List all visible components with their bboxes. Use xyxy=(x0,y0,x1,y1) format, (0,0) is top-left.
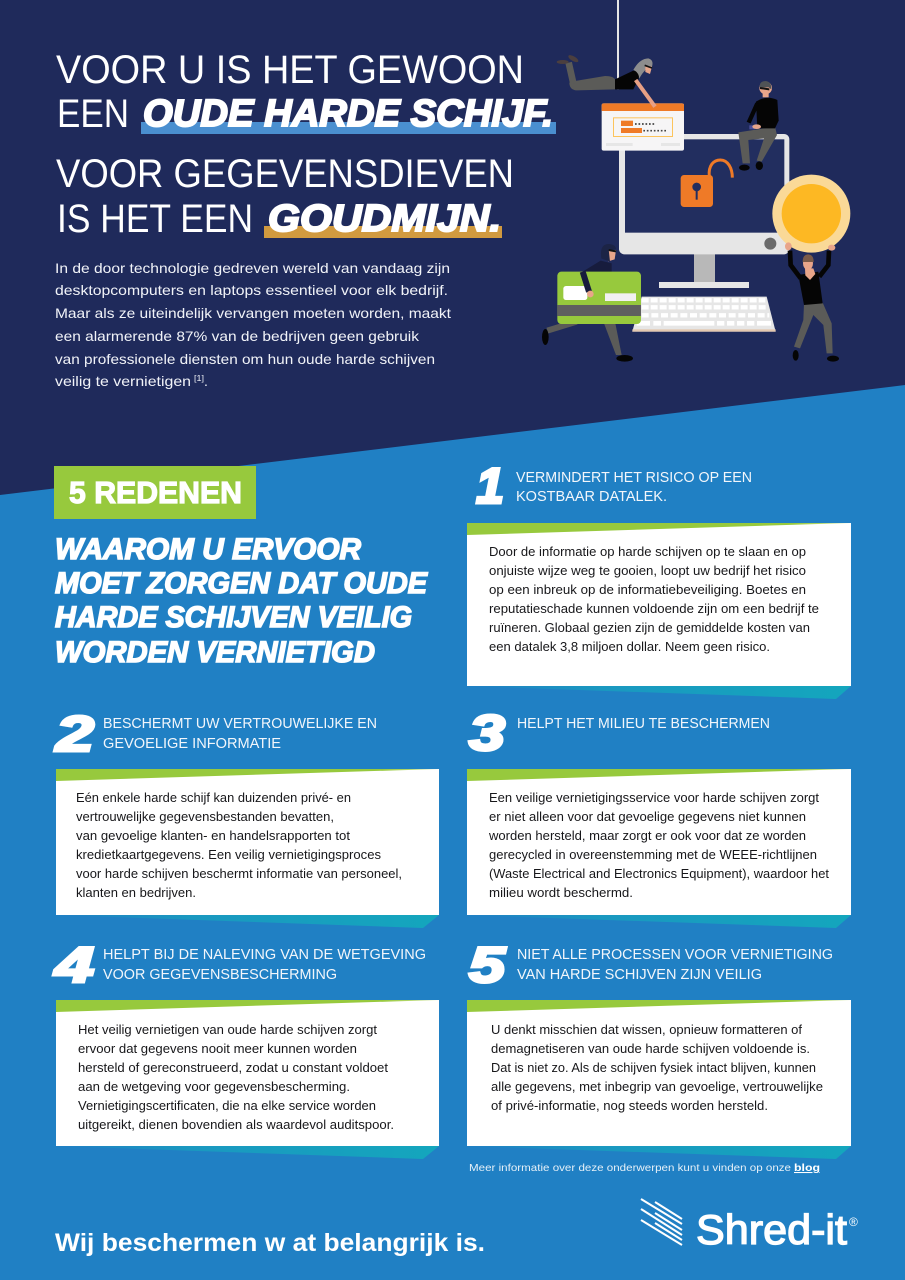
panel: reason 1: KOSTBAAR DATALEK. xyxy=(516,488,667,505)
panel: reason 5: U denkt misschien dat wissen, opnieuw formatteren of xyxy=(491,1022,802,1037)
panel: reason 4: 4 xyxy=(54,937,94,993)
panel: reason 1: reputatieschade kunnen voldoende zijn om een bedrijf te xyxy=(489,601,819,616)
footnote: blog link: blog xyxy=(794,1162,820,1174)
panel: reason 3: worden hersteld, maar zorgt er ook voor dat ze worden xyxy=(488,828,806,843)
intro text: . xyxy=(204,373,208,389)
title: EEN xyxy=(57,92,129,136)
panel: reason 2: 2 xyxy=(55,706,94,762)
panel: reason 3: Een veilige vernietigingsservice voor harde schijven zorgt xyxy=(489,790,819,805)
background: blue diagonal section xyxy=(0,385,905,1280)
slogan: Wij beschermen w at belangrijk is. xyxy=(55,1229,485,1257)
panel: reason 5: VAN HARDE SCHIJVEN ZIJN VEILIG xyxy=(517,966,762,983)
heading: waarom: WAAROM U ERVOOR xyxy=(55,533,362,566)
panel: reason 3: (Waste Electrical and Electronics Equipment), waardoor het xyxy=(489,866,829,881)
panel: reason 4: Het veilig vernietigen van oude harde schijven zorgt xyxy=(78,1022,377,1037)
panel: reason 5: demagnetiseren van oude harde schijven voldoende is. xyxy=(491,1041,810,1056)
icon: rope xyxy=(617,0,619,89)
icon: credit card xyxy=(557,272,641,324)
badge: 5 redenen xyxy=(54,466,256,519)
icon: login window xyxy=(602,103,684,151)
panel: reason 2: kredietkaartgegevens. Een veilig vernietigingsproces xyxy=(76,847,381,862)
icon: monitor xyxy=(619,134,789,288)
panel: reason 1: VERMINDERT HET RISICO OP EEN xyxy=(516,469,752,486)
badge: 5 redenen: 5 REDENEN xyxy=(69,475,242,510)
logo: Shred-it: Shred-it xyxy=(696,1206,847,1253)
panel: reason 4: hersteld of gereconstrueerd, zodat u constant voldoet xyxy=(78,1060,388,1075)
panel: reason 3 xyxy=(467,705,851,928)
title xyxy=(56,48,556,241)
title: IS HET EEN xyxy=(57,197,253,241)
panel: reason 2: GEVOELIGE INFORMATIE xyxy=(103,735,281,752)
title: VOOR U IS HET GEWOON xyxy=(56,48,524,92)
title: GOUDMIJN. xyxy=(268,198,501,240)
logo: Shred-it: ® xyxy=(849,1215,858,1229)
panel: reason 4: Vernietigingscertificaten, die na elke service worden xyxy=(78,1098,376,1113)
panel: reason 4: uitgereikt, dienen bovendien als waardevol auditspoor. xyxy=(78,1117,394,1132)
icon: gold coin xyxy=(772,175,850,253)
panel: reason 5 xyxy=(467,937,851,1159)
panel: reason 2: van gevoelige klanten- en handelsrapporten tot xyxy=(76,828,350,843)
figure: thief with credit card xyxy=(542,244,641,362)
icon: keyboard xyxy=(632,297,776,332)
panel: reason 3: milieu wordt beschermd. xyxy=(489,885,633,900)
underline: gold highlight xyxy=(264,226,502,238)
intro text: [1] xyxy=(194,373,204,383)
panel: reason 3: gerecycled in overeenstemming met de WEEE-richtlijnen xyxy=(489,847,817,862)
panel: reason 3: HELPT HET MILIEU TE BESCHERMEN xyxy=(517,715,770,732)
figure: person lifting coin xyxy=(785,242,839,362)
intro text: een alarmerende 87% van de bedrijven geen gebruik xyxy=(55,328,420,344)
heading: waarom: WORDEN VERNIETIGD xyxy=(55,636,375,669)
icon: open padlock xyxy=(681,160,732,207)
heading: waarom xyxy=(55,533,428,669)
panel: reason 5: NIET ALLE PROCESSEN VOOR VERNIETIGING xyxy=(517,946,833,963)
panel: reason 1 xyxy=(467,458,851,699)
panel: reason 1: ruïneren. Globaal gezien zijn de gemiddelde kosten van xyxy=(489,620,810,635)
panel: reason 1: een datalek 3,8 miljoen dollar. Neem geen risico. xyxy=(489,639,770,654)
panel: reason 5: of privé-informatie, nog steeds worden hersteld. xyxy=(491,1098,768,1113)
icon: shredder stripes xyxy=(641,1199,682,1245)
panel: reason 5: Dat is niet zo. Als de schijven fysiek intact blijven, kunnen xyxy=(491,1060,816,1075)
intro text: Maar als ze uiteindelijk vervangen moeten worden, maakt xyxy=(55,305,451,321)
panel: reason 4: aan de wetgeving voor gegevensbescherming. xyxy=(78,1079,350,1094)
panel: reason 3: 3 xyxy=(469,705,505,761)
panel: reason 4 xyxy=(54,937,439,1159)
intro text: van professionele diensten om hun oude harde schijven xyxy=(55,351,435,367)
intro text: In de door technologie gedreven wereld van vandaag zijn xyxy=(55,260,450,276)
illustration: hackers around computer xyxy=(542,0,850,362)
title: OUDE HARDE SCHIJF. xyxy=(143,93,553,135)
panel: reason 5: 5 xyxy=(469,937,507,993)
panel: reason 2: Eén enkele harde schijf kan duizenden privé- en xyxy=(76,790,351,805)
intro text: desktopcomputers en laptops essentieel voor elk bedrijf. xyxy=(55,282,448,298)
footnote: blog link: Meer informatie over deze onderwerpen kunt u vinden op onze xyxy=(469,1162,791,1174)
intro text: veilig te vernietigen xyxy=(55,373,191,389)
panel: reason 4: ervoor dat gegevens nooit meer kunnen worden xyxy=(78,1041,357,1056)
intro text xyxy=(55,260,451,389)
panel: reason 4: VOOR GEGEVENSBESCHERMING xyxy=(103,966,337,983)
panel: reason 2: voor harde schijven beschermt informatie van personeel, xyxy=(76,866,402,881)
figure: hacker on monitor xyxy=(738,81,779,171)
title: VOOR GEGEVENSDIEVEN xyxy=(56,152,514,196)
panel: reason 3: er niet alleen voor dat gevoelige gegevens niet kunnen xyxy=(489,809,806,824)
panel: reason 1: 1 xyxy=(476,458,504,514)
underline: blue highlight xyxy=(141,122,556,134)
panel: reason 1: op een inbreuk op de informatiebeveiliging. Boetes en xyxy=(489,582,806,597)
panel: reason 5: alle gegevens, met inbegrip van gevoelige, vertrouwelijke xyxy=(491,1079,823,1094)
heading: waarom: MOET ZORGEN DAT OUDE xyxy=(55,567,428,600)
panel: reason 2: vertrouwelijke gegevensbestanden bevatten, xyxy=(76,809,334,824)
figure: hacker on rope xyxy=(557,54,655,107)
panel: reason 2: BESCHERMT UW VERTROUWELIJKE EN xyxy=(103,715,377,732)
panel: reason 1: onjuiste wijze weg te gooien, loopt uw bedrijf het risico xyxy=(489,563,806,578)
logo: Shred-it xyxy=(641,1199,858,1253)
heading: waarom: HARDE SCHIJVEN VEILIG xyxy=(55,601,412,634)
panel: reason 1: Door de informatie op harde schijven op te slaan en op xyxy=(489,544,806,559)
panel: reason 2: klanten en bedrijven. xyxy=(76,885,196,900)
panel: reason 4: HELPT BIJ DE NALEVING VAN DE WETGEVING xyxy=(103,946,426,963)
panel: reason 2 xyxy=(55,706,439,928)
